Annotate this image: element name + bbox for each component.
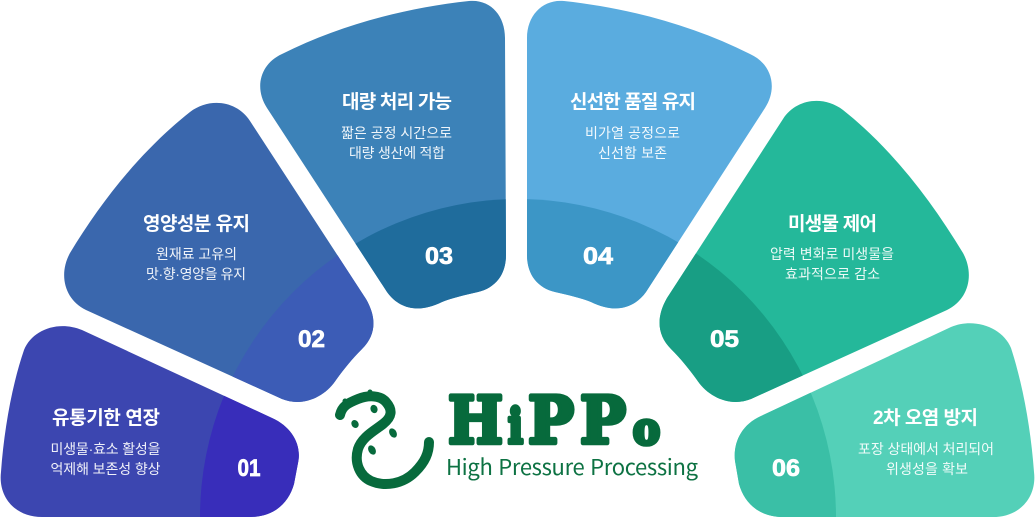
panel 02 inner arc bbox=[232, 255, 374, 402]
panel 03 heading: 대량 처리 가능 bbox=[342, 91, 452, 113]
panel 03 description: 대량 생산에 적합 bbox=[349, 145, 445, 161]
logo wordmark: P bbox=[528, 383, 574, 459]
panel 01 number: 01 bbox=[238, 455, 260, 482]
panel 05 inner arc bbox=[660, 254, 803, 402]
panel 06 description: 위생성을 확보 bbox=[886, 461, 968, 477]
panel 02 description: 맛·향·영양을 유지 bbox=[146, 266, 246, 282]
logo wordmark: P bbox=[580, 383, 626, 459]
panel 03 inner arc bbox=[356, 199, 506, 308]
panel 05 description: 압력 변화로 미생물을 bbox=[770, 246, 894, 262]
panel 06 background bbox=[735, 323, 1034, 517]
panel 02 background bbox=[64, 103, 373, 402]
panel 03 background bbox=[260, 1, 506, 308]
icon: green seahorse curve with spots bbox=[340, 390, 429, 484]
panel 06 inner arc bbox=[734, 392, 836, 517]
panel 05 background bbox=[660, 101, 969, 402]
panel 03 description bbox=[341, 125, 452, 161]
panel 01 heading: 유통기한 연장 bbox=[52, 407, 160, 429]
panel 03 number: 03 bbox=[425, 243, 453, 270]
panel: 03 mass processing bbox=[260, 0, 506, 308]
panel 06 description bbox=[858, 441, 994, 477]
panel 05 description: 효과적으로 감소 bbox=[785, 266, 880, 282]
panel: 05 microbe control bbox=[660, 100, 969, 402]
panel 05 heading: 미생물 제어 bbox=[788, 213, 877, 235]
panel 04 background bbox=[527, 1, 772, 308]
panel 02 description bbox=[146, 246, 246, 282]
panel 02 description: 원재료 고유의 bbox=[156, 246, 237, 262]
panel 01 description: 억제해 보존성 향상 bbox=[50, 461, 161, 477]
panel 02 heading: 영양성분 유지 bbox=[143, 213, 250, 235]
logo subtitle: High Pressure Processing bbox=[446, 450, 699, 482]
panel 06 number: 06 bbox=[772, 455, 800, 482]
panel 01 description bbox=[50, 441, 161, 477]
panel 06 heading: 2차 오염 방지 bbox=[873, 407, 978, 429]
panel 04 number: 04 bbox=[583, 243, 614, 270]
panel 01 description: 미생물·효소 활성을 bbox=[50, 441, 161, 457]
panel 04 description: 비가열 공정으로 bbox=[585, 125, 680, 141]
panel: 02 nutrient retention bbox=[64, 102, 374, 402]
panel 02 number: 02 bbox=[298, 326, 325, 353]
panel: 01 shelf life extension bbox=[0, 326, 299, 517]
logo wordmark bbox=[448, 383, 660, 459]
panel 03 description: 짧은 공정 시간으로 bbox=[341, 125, 452, 141]
panel 01 background bbox=[1, 326, 299, 517]
logo wordmark: o bbox=[633, 404, 660, 455]
logo wordmark: H bbox=[448, 383, 503, 459]
panel 04 description: 신선함 보존 bbox=[598, 145, 667, 161]
panel: 04 fresh quality bbox=[527, 0, 772, 308]
panel 05 number: 05 bbox=[710, 326, 739, 353]
panel 04 heading: 신선한 품질 유지 bbox=[570, 91, 696, 113]
panel 01 inner arc bbox=[200, 396, 299, 517]
logo: HiPPo bbox=[340, 383, 699, 484]
panel: 06 secondary contamination bbox=[734, 323, 1034, 517]
panel 05 description bbox=[770, 246, 894, 282]
logo wordmark: i bbox=[508, 399, 523, 455]
panel 04 description bbox=[585, 125, 680, 161]
panel 04 inner arc bbox=[527, 199, 678, 308]
panel 06 description: 포장 상태에서 처리되어 bbox=[858, 441, 994, 457]
